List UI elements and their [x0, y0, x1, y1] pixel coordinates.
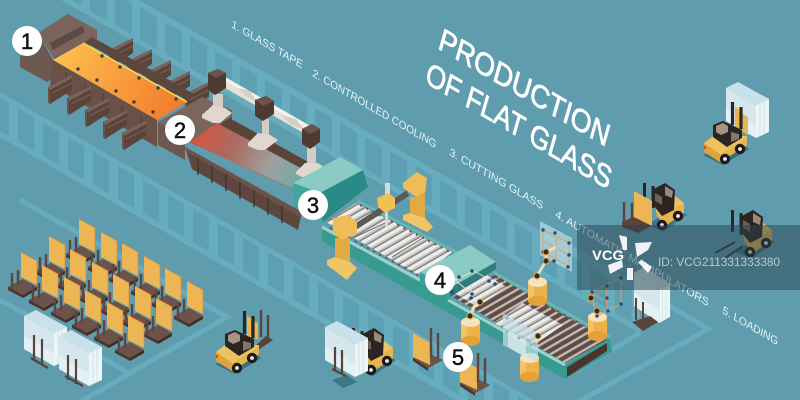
badge 3 — [298, 190, 328, 220]
badge 5 — [443, 342, 473, 372]
glass stack under robot — [632, 267, 670, 331]
step labels — [230, 18, 779, 348]
pallets near step five — [413, 328, 490, 396]
watermark band — [577, 225, 800, 290]
badge 2: 2 — [174, 118, 186, 143]
robot cylinder — [528, 277, 547, 306]
wire frame — [588, 276, 623, 318]
forklift with empty forks — [715, 210, 775, 258]
cooling back rail — [222, 120, 310, 172]
first roller bed — [326, 203, 452, 277]
number badges — [12, 26, 473, 372]
dark beam end blocks — [208, 69, 320, 149]
furnace back modules — [109, 38, 209, 111]
badge 2 — [165, 115, 195, 145]
badge 4 — [425, 265, 455, 295]
forklift carrying glass bottom — [325, 321, 396, 388]
robot arm — [534, 247, 556, 279]
glass sheet — [503, 313, 541, 363]
furnace end block — [20, 14, 97, 82]
conveyor teal side — [322, 227, 565, 379]
badge 3: 3 — [307, 193, 319, 218]
cooling gantry with white beams — [202, 69, 325, 177]
label 2: 2. CONTROLLED COOLING — [311, 67, 437, 151]
furnace: glass tape section — [20, 14, 209, 150]
badge 1: 1 — [21, 29, 33, 54]
conveyor end cap — [565, 338, 612, 379]
cutting head — [377, 183, 395, 227]
watermark id text: ID: VCG211331333380 — [658, 257, 780, 269]
molten glass tape — [53, 43, 187, 120]
conveyor line — [293, 157, 612, 379]
cutting bridge bar — [352, 193, 408, 229]
badge 4: 4 — [434, 268, 446, 293]
second conveyor rails — [448, 272, 610, 365]
title line one: PRODUCTION — [435, 22, 614, 154]
cooling section — [158, 97, 310, 230]
badge 5: 5 — [452, 345, 464, 370]
title — [422, 22, 615, 197]
teal furnace exit box — [293, 157, 368, 222]
robot with glass over conveyor — [503, 313, 541, 382]
support legs and bases — [202, 94, 325, 177]
white beams — [225, 77, 312, 138]
label 1: 1. GLASS TAPE — [230, 18, 304, 71]
robot cylinder — [461, 317, 480, 346]
forklift with glass top right — [703, 82, 769, 165]
second roller bed — [453, 273, 607, 363]
glass panel held — [540, 221, 572, 272]
cooling junction block — [158, 97, 232, 160]
label 4: 4. AUTOMATIC MANIPULATORS — [554, 208, 710, 309]
robot arm with cube frame right — [588, 276, 623, 341]
robot arm with glass panel upper — [528, 221, 572, 306]
furnace pins — [76, 54, 178, 114]
furnace back rail — [85, 37, 194, 101]
furnace front modules — [48, 75, 146, 150]
robot cylinder — [520, 353, 539, 382]
far gantry column — [403, 172, 433, 232]
title line two: OF FLAT GLASS — [422, 56, 615, 197]
cooling front rail — [185, 147, 302, 230]
background wall band upper — [61, 0, 640, 333]
forklift with yellow panel pallet — [622, 183, 687, 233]
cooling glass tape — [190, 123, 310, 190]
teal transfer box — [420, 245, 496, 300]
background wall band lower — [0, 92, 533, 400]
watermark burst icon — [608, 235, 652, 280]
first conveyor rails — [322, 201, 458, 281]
robot cylinder — [588, 312, 607, 341]
robot with frame on conveyor — [450, 269, 497, 346]
yellow cutting gantry — [327, 172, 433, 280]
label 5: 5. LOADING — [721, 304, 779, 348]
wire frame — [450, 269, 497, 300]
glass stacks on pallets bottom left — [24, 310, 102, 386]
badge 1 — [12, 26, 42, 56]
watermark logo text: VCG — [592, 248, 624, 263]
pallets with yellow panels grid — [8, 219, 203, 361]
label 3: 3. CUTTING GLASS — [448, 146, 544, 212]
forklift with empty pallet — [215, 310, 273, 374]
robot arm — [467, 298, 483, 319]
near gantry column — [327, 215, 357, 280]
floor outline lines — [0, 200, 708, 400]
furnace front wall — [50, 60, 157, 147]
molten glass yellow edge — [83, 43, 187, 102]
